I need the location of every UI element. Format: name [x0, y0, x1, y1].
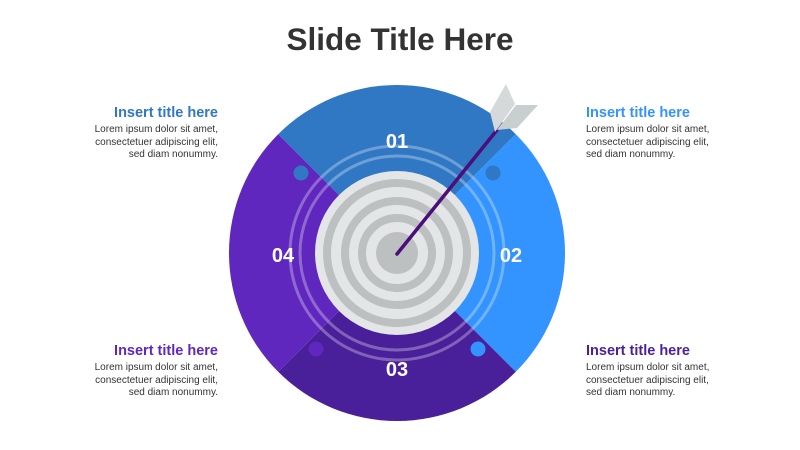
title: Slide Title Here	[286, 21, 514, 57]
text block: bottom-left	[95, 343, 218, 398]
text block: top-right: consectetuer adipiscing elit,	[586, 136, 709, 148]
text block: bottom-left: consectetuer adipiscing elit,	[95, 374, 218, 386]
text block: top-left: Lorem ipsum dolor sit amet,	[95, 124, 218, 135]
text block: bottom-left: Lorem ipsum dolor sit amet,	[95, 362, 218, 373]
text block: top-left: consectetuer adipiscing elit,	[95, 136, 218, 148]
numbers: 03	[386, 359, 408, 381]
text block: bottom-right: consectetuer adipiscing elit,	[586, 374, 709, 386]
text block: top-right: Insert title here	[586, 105, 690, 121]
pale rings	[290, 146, 504, 360]
numbers: 02	[500, 245, 522, 267]
text block: top-left: Insert title here	[114, 105, 218, 121]
segment 02	[397, 134, 565, 372]
text block: bottom-left: sed diam nonummy.	[129, 387, 218, 398]
text block: bottom-right: Insert title here	[586, 343, 690, 359]
text block: top-left: sed diam nonummy.	[129, 149, 218, 160]
text block: bottom-right: Lorem ipsum dolor sit amet,	[586, 362, 709, 373]
text block: top-right: sed diam nonummy.	[586, 149, 675, 160]
numbers	[272, 131, 522, 381]
segment 04	[229, 134, 397, 372]
text block: bottom-left: Insert title here	[114, 343, 218, 359]
numbers: 04	[272, 245, 295, 267]
text block: top-right: Lorem ipsum dolor sit amet,	[586, 124, 709, 135]
segment 03	[278, 253, 516, 421]
text block: bottom-right: sed diam nonummy.	[586, 387, 675, 398]
numbers: 01	[386, 131, 408, 153]
segment 01	[278, 85, 516, 253]
text block: bottom-right	[586, 343, 709, 398]
puzzle knobs	[294, 166, 500, 356]
target	[315, 171, 479, 335]
icon: arrow	[397, 84, 538, 254]
text block: top-right	[586, 105, 709, 160]
text block: top-left	[95, 105, 218, 160]
